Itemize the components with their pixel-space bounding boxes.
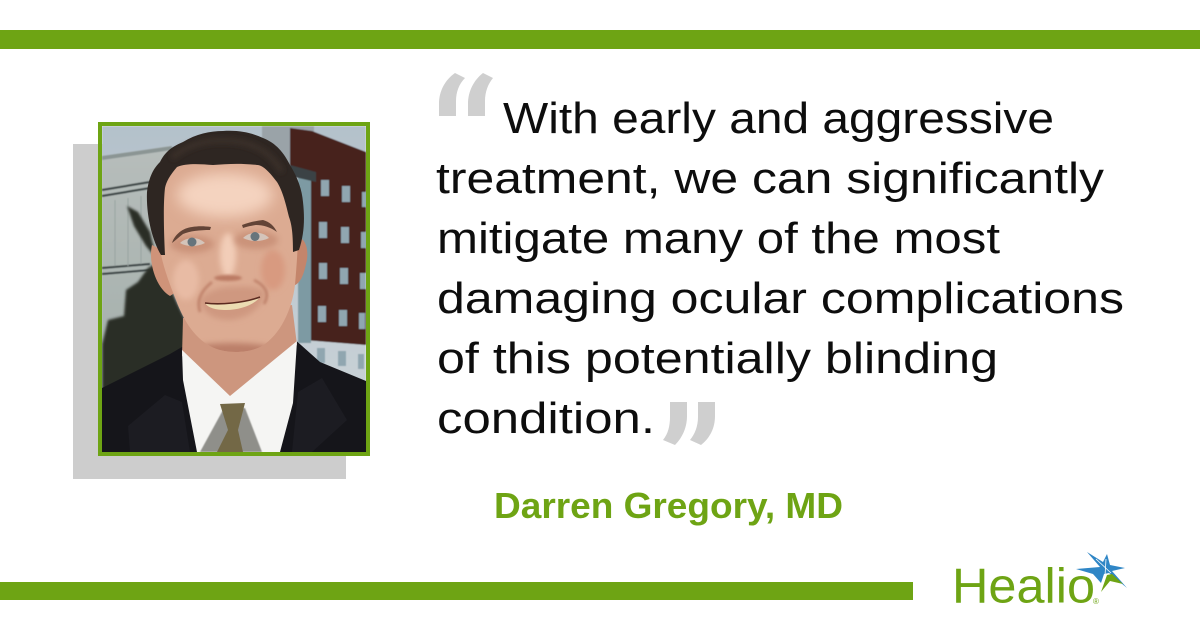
mouth area shadow	[200, 287, 265, 320]
chin shadow	[204, 340, 265, 352]
dark tree	[102, 206, 190, 392]
attribution name: Darren Gregory, MD	[494, 485, 843, 526]
neck	[182, 305, 297, 402]
face	[161, 164, 298, 352]
eyebrows	[172, 226, 211, 243]
logo wordmark: Healio	[952, 560, 1095, 614]
quote text: treatment, we can significantly	[436, 154, 1104, 203]
eyes	[180, 238, 205, 246]
forehead highlight	[177, 173, 273, 217]
registered mark: ®	[1093, 597, 1099, 606]
quote text: of this potentially blinding	[437, 334, 998, 383]
cheek warmth	[173, 260, 199, 300]
quote text: damaging ocular complications	[437, 274, 1124, 323]
photo frame	[100, 124, 368, 454]
closing quotation mark	[663, 402, 715, 445]
ears	[151, 245, 174, 296]
nose underside	[214, 275, 242, 281]
suit jacket	[102, 337, 366, 452]
quote text: condition.	[437, 394, 655, 443]
tie	[217, 403, 245, 452]
eye socket shadows	[170, 235, 214, 253]
logo star	[1076, 552, 1127, 592]
sky and building background	[102, 126, 366, 381]
white shirt and collar	[182, 341, 297, 452]
opening quotation mark	[439, 73, 493, 116]
smile	[206, 298, 259, 310]
portrait photo with green frame	[100, 124, 368, 454]
nasolabial lines	[199, 282, 212, 312]
nose highlight	[220, 233, 236, 277]
gray offset panel behind photo	[73, 144, 346, 479]
Healio logo	[952, 552, 1127, 614]
quote text: With early and aggressive	[503, 94, 1054, 143]
quote text: mitigate many of the most	[437, 214, 1000, 263]
top green bar	[0, 30, 1200, 49]
hair	[147, 131, 304, 255]
quote text	[436, 94, 1124, 443]
photo content	[102, 126, 368, 452]
bottom green bar	[0, 582, 913, 600]
